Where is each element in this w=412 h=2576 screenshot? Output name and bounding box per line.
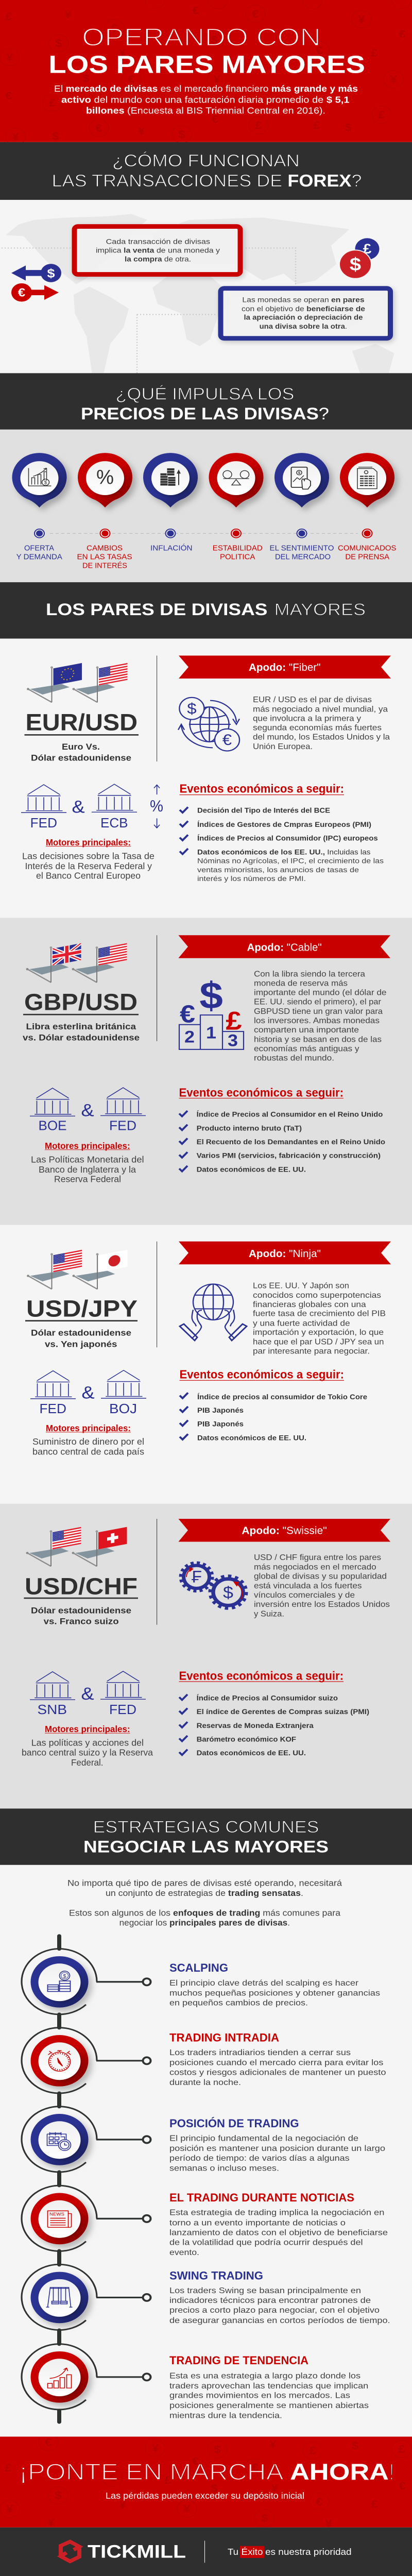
central banks bbox=[21, 784, 137, 831]
description: y Suiza. bbox=[254, 1609, 284, 1618]
panel: GBP/USD bbox=[0, 918, 412, 1225]
step: scalping: SCALPING bbox=[169, 1962, 228, 1975]
intro text: un conjunto de estrategias de trading sensatas. bbox=[106, 1888, 303, 1898]
pin: market sentiment: $ bbox=[298, 471, 301, 475]
description: global de divisas y su popularidad bbox=[254, 1572, 387, 1581]
main drivers: Motores principales: bbox=[46, 1423, 131, 1434]
description: importante del mundo (el dólar de bbox=[254, 988, 386, 997]
main drivers bbox=[22, 1724, 153, 1768]
economic events: PIB Japonés bbox=[197, 1406, 244, 1415]
tagline: es nuestra prioridad bbox=[265, 2547, 352, 2557]
economic events: Índices de Gestores de Cmpras Europeos (PMI) bbox=[197, 821, 371, 829]
main drivers: Interés de la Reserva Federal y bbox=[25, 861, 152, 871]
pair title: USD/JPY bbox=[26, 1296, 138, 1322]
central banks: BOJ bbox=[109, 1401, 137, 1416]
main drivers: Las decisiones sobre la Tasa de bbox=[22, 852, 154, 861]
main drivers: banco central suizo y la Reserva bbox=[22, 1748, 153, 1758]
economic events bbox=[179, 783, 384, 883]
heading: que impulsa: ¿QUÉ IMPULSA LOS bbox=[115, 385, 294, 403]
economic events: El índice de Gerentes de Compras suizas (PMI) bbox=[197, 1708, 369, 1716]
description: moneda de reserva más bbox=[254, 978, 348, 988]
callout: blue box: una divisa sobre la otra. bbox=[260, 323, 347, 331]
main drivers: Suministro de dinero por el bbox=[32, 1437, 144, 1447]
panel: strategies bbox=[0, 1865, 412, 2436]
step: trading de tendencia bbox=[22, 2344, 369, 2420]
step: trading durante noticias: evento. bbox=[169, 2248, 199, 2257]
icon: currency podium: 1 bbox=[206, 1024, 216, 1042]
driver labels: CAMBIOS bbox=[87, 544, 123, 552]
heading: que impulsa bbox=[0, 373, 412, 430]
pin: political stability bbox=[209, 453, 264, 507]
economic events: Datos económicos de EE. UU. bbox=[197, 1749, 306, 1757]
description: más negociados en el mercado bbox=[254, 1562, 376, 1571]
description: EE. UU. siendo el primero), el par bbox=[254, 997, 381, 1006]
economic events: PIB Japonés bbox=[197, 1420, 244, 1428]
economic events: Índice de precios al consumidor de Tokio Core bbox=[197, 1393, 367, 1401]
description bbox=[253, 695, 390, 751]
icon: currency podium bbox=[179, 975, 244, 1050]
central banks: FED bbox=[109, 1702, 136, 1717]
economic events: Eventos económicos a seguir: bbox=[179, 1670, 344, 1683]
pair title bbox=[24, 1573, 138, 1626]
background currency pattern: £¥€€¥££$¥$€€$€¥€$¥€$¥€¥££€$¥£ bbox=[5, 4, 406, 143]
economic events: Producto interno bruto (TaT) bbox=[197, 1124, 302, 1132]
ribbon: nickname bbox=[178, 935, 390, 958]
step: posicion de trading bbox=[22, 2107, 385, 2173]
heading: los pares de divisas mayores bbox=[0, 582, 412, 639]
economic events: El Recuento de los Demandantes en el Reino Unido bbox=[197, 1138, 385, 1146]
icon: globe held by hands bbox=[180, 1284, 247, 1341]
intro text bbox=[67, 1878, 342, 1927]
step: posicion de trading: El principio fundamental de la negociación de bbox=[169, 2133, 358, 2143]
driver labels: OFERTA bbox=[24, 544, 54, 552]
ribbon: nickname: Apodo: "Ninja" bbox=[249, 1247, 321, 1260]
pair title bbox=[25, 1296, 138, 1349]
title: OPERANDO CON bbox=[82, 23, 321, 51]
economic events: Índice de Precios al Consumidor suizo bbox=[197, 1694, 338, 1702]
economic events: Varios PMI (servicios, fabricación y construcción) bbox=[197, 1152, 381, 1160]
description: Con la libra siendo la tercera bbox=[254, 969, 366, 978]
intro text: Estos son algunos de los enfoques de trading más comunes para bbox=[69, 1908, 340, 1918]
driver labels: ESTABILIDAD bbox=[213, 544, 263, 552]
icon: buying euro arrow bbox=[11, 283, 59, 302]
description: Los EE. UU. Y Japón son bbox=[253, 1281, 349, 1290]
economic events: Datos económicos de EE. UU. bbox=[197, 1434, 306, 1442]
icon: currency podium: 2 bbox=[184, 1028, 195, 1046]
main drivers: Reserva Federal bbox=[54, 1175, 121, 1184]
step: trading de tendencia: TRADING DE TENDENCIA bbox=[169, 2354, 308, 2367]
logo: tickmill: TICKMILL bbox=[88, 2541, 186, 2562]
pair title: EUR/USD bbox=[26, 709, 138, 736]
pin: interest rates: % bbox=[96, 466, 114, 488]
step: trading intradia: costos y riesgos adicionales de mantener un puesto bbox=[169, 2067, 386, 2077]
driver labels: DE INTERÉS bbox=[82, 561, 127, 570]
pin: inflation bbox=[143, 453, 198, 507]
disclaimer: Las pérdidas pueden exceder su depósito inicial bbox=[106, 2491, 304, 2501]
description: está vinculada a los fuertes bbox=[254, 1581, 362, 1590]
heading: como funcionan: ¿CÓMO FUNCIONAN bbox=[112, 151, 300, 171]
intro text: negociar los principales pares de divisas. bbox=[119, 1918, 290, 1927]
description: hace que el par USD / JPY sea un bbox=[253, 1337, 384, 1346]
panel: footer bbox=[0, 2528, 412, 2576]
economic events: Eventos económicos a seguir: bbox=[179, 1087, 344, 1099]
description: robustas del mundo. bbox=[254, 1053, 334, 1062]
heading: como funcionan: LAS TRANSACCIONES DE FOREX? bbox=[52, 172, 362, 191]
description: más negociado a nivel mundial, ya bbox=[253, 704, 388, 714]
central banks: FED bbox=[30, 816, 57, 831]
economic events: Eventos económicos a seguir: bbox=[179, 783, 344, 795]
step: trading durante noticias: Esta estrategia de trading implica la negociación en bbox=[169, 2208, 384, 2217]
step: posicion de trading: semanas o incluso meses. bbox=[169, 2163, 279, 2173]
heading: que impulsa: PRECIOS DE LAS DIVISAS? bbox=[81, 405, 329, 423]
description: segunda economías más fuertes bbox=[253, 723, 382, 732]
economic events: Índice de Precios al Consumidor en el Reino Unido bbox=[197, 1110, 383, 1118]
pin: press releases bbox=[340, 453, 394, 507]
step: trading de tendencia: grandes movimientos en los mercados. Las bbox=[169, 2391, 350, 2400]
pin: supply and demand bbox=[12, 453, 67, 507]
pair title: USD/CHF bbox=[25, 1573, 138, 1600]
step: posicion de trading: POSICIÓN DE TRADING bbox=[169, 2116, 299, 2130]
flags: US and Switzerland bbox=[26, 1527, 127, 1566]
driver labels: EL SENTIMIENTO bbox=[270, 544, 334, 552]
main drivers: Motores principales: bbox=[45, 1724, 130, 1735]
main drivers bbox=[31, 1141, 144, 1184]
pair title: Libra esterlina británica bbox=[26, 1022, 136, 1031]
main drivers bbox=[32, 1423, 144, 1457]
callout: blue box bbox=[220, 289, 390, 338]
step: scalping bbox=[22, 1949, 380, 2014]
dotted connectors bbox=[2, 248, 296, 373]
main drivers: Motores principales: bbox=[46, 838, 131, 848]
step: swing trading: Los traders Swing se basan principalmente en bbox=[169, 2286, 361, 2295]
economic events: Reservas de Moneda Extranjera bbox=[197, 1722, 314, 1730]
description: importación y exportación, lo que bbox=[253, 1328, 384, 1337]
step: trading de tendencia: traders aprovechan las tendencias que implican bbox=[169, 2381, 368, 2391]
icon: coins pound and dollar bbox=[339, 238, 379, 279]
panel: EUR/USD bbox=[0, 639, 412, 918]
economic events: Índices de Precios al Consumidor (IPC) europeos bbox=[197, 834, 378, 842]
panel: USD/JPY bbox=[0, 1225, 412, 1504]
timeline dots bbox=[35, 529, 372, 538]
step: trading durante noticias bbox=[22, 2185, 388, 2257]
icon: selling dollar arrow: $ bbox=[47, 267, 55, 280]
description: fuerte tasa de crecimiento del PIB bbox=[253, 1309, 386, 1318]
icon: linked gears bbox=[181, 1563, 246, 1608]
icon: linked gears: ₣ bbox=[192, 1568, 202, 1586]
call to action heading bbox=[19, 2460, 393, 2485]
description: EUR / USD es el par de divisas bbox=[253, 695, 372, 704]
tagline: Tu bbox=[228, 2547, 238, 2557]
interest rate arrows bbox=[150, 785, 163, 828]
main drivers bbox=[22, 838, 154, 881]
intro text: No importa qué tipo de pares de divisas esté operando, necesitará bbox=[67, 1878, 342, 1888]
economic events: Decisión del Tipo de Interés del BCE bbox=[197, 806, 330, 815]
pair title: vs. Yen japonés bbox=[45, 1339, 117, 1349]
step: scalping: en pequeños cambios de precios. bbox=[169, 1998, 308, 2007]
icon: coins pound and dollar: £ bbox=[363, 242, 372, 257]
description: del mundo, los Estados Unidos y la bbox=[253, 733, 390, 742]
description: historia y se basan en dos de las bbox=[254, 1035, 382, 1044]
main drivers: Las Políticas Monetaria del bbox=[31, 1155, 144, 1165]
call to action heading: ! bbox=[390, 2460, 393, 2485]
ribbon: nickname: Apodo: "Cable" bbox=[247, 941, 322, 953]
pin: market sentiment bbox=[274, 453, 329, 507]
economic events bbox=[179, 1087, 385, 1174]
description: comparten una importante bbox=[254, 1025, 359, 1035]
panel: red call to action bbox=[0, 2433, 412, 2529]
main drivers: banco central de cada país bbox=[32, 1447, 144, 1457]
central banks: & bbox=[81, 1684, 94, 1704]
pair title: vs. Franco suizo bbox=[44, 1617, 119, 1626]
panel: price drivers bbox=[0, 430, 412, 582]
heading: los pares de divisas mayores: MAYORES bbox=[274, 601, 366, 619]
driver labels: EN LAS TASAS bbox=[77, 552, 132, 561]
pin: supply and demand: $ bbox=[44, 480, 47, 485]
heading: como funcionan bbox=[0, 142, 412, 200]
description: inversión entre los Estados Unidos bbox=[254, 1600, 390, 1609]
driver labels: INFLACIÓN bbox=[150, 544, 193, 552]
economic events: Datos económicos de los EE. UU., Incluidas las bbox=[197, 848, 371, 856]
description: y una fuerte actividad de bbox=[253, 1318, 350, 1328]
icon: globe with currencies: $ bbox=[187, 700, 197, 717]
description bbox=[254, 969, 386, 1062]
title: LOS PARES MAYORES bbox=[48, 50, 365, 78]
interest rate arrows: % bbox=[150, 798, 163, 816]
driver labels bbox=[16, 544, 396, 570]
callout: red box bbox=[74, 227, 240, 275]
central banks bbox=[30, 1671, 146, 1717]
description: vínculos comerciales y de bbox=[254, 1590, 355, 1600]
step: trading durante noticias: EL TRADING DURANTE NOTICIAS bbox=[169, 2192, 354, 2205]
driver labels: POLITICA bbox=[220, 552, 255, 561]
central banks bbox=[30, 1088, 146, 1133]
description: los inversores. Ambas monedas bbox=[254, 1016, 380, 1025]
ribbon: nickname bbox=[179, 1242, 391, 1264]
icon: coins pound and dollar: $ bbox=[350, 255, 361, 275]
icon: currency podium: 3 bbox=[228, 1031, 238, 1050]
main drivers: Federal. bbox=[71, 1758, 103, 1768]
pair title bbox=[25, 709, 139, 762]
flags: UK and US bbox=[26, 943, 127, 982]
pair title: GBP/USD bbox=[24, 989, 138, 1015]
intro text: billones (Encuesta al BIS Triennial Central en 2016). bbox=[86, 106, 325, 116]
description bbox=[254, 1553, 390, 1618]
description: que involucra a la primera y bbox=[253, 714, 361, 723]
step: swing trading bbox=[22, 2264, 390, 2330]
callout: red box: implica la venta de una moneda y bbox=[96, 247, 220, 255]
icon: globe with currencies bbox=[178, 698, 239, 751]
central banks: ECB bbox=[100, 816, 128, 831]
step: scalping: muchos pequeñas posiciones y obtener ganancias bbox=[169, 1988, 380, 1997]
step: posicion de trading: período de tiempo: de varios días a algunas bbox=[169, 2154, 350, 2163]
central banks bbox=[30, 1370, 146, 1416]
step: swing trading: de asegurar ganancias en cortos períodos de tiempo. bbox=[169, 2316, 390, 2325]
central banks: BOE bbox=[38, 1118, 67, 1133]
panel: USD/CHF bbox=[0, 1504, 412, 1808]
driver labels: COMUNICADOS bbox=[338, 544, 396, 552]
step: trading de tendencia: mientras dure la tendencia. bbox=[169, 2411, 282, 2420]
step: trading intradia: durante la noche. bbox=[169, 2078, 241, 2087]
icon: currency podium: £ bbox=[226, 1007, 242, 1036]
flags: EU and US bbox=[27, 663, 128, 702]
step: scalping: El principio clave detrás del scalping es hacer bbox=[169, 1978, 358, 1988]
description: USD / CHF figura entre los pares bbox=[254, 1553, 381, 1562]
driver labels: DE PRENSA bbox=[345, 552, 389, 561]
ribbon: nickname: Apodo: "Fiber" bbox=[249, 661, 320, 673]
step: swing trading: SWING TRADING bbox=[169, 2269, 263, 2282]
main drivers: Motores principales: bbox=[45, 1141, 130, 1151]
callout: red box: Cada transacción de divisas bbox=[106, 238, 210, 246]
economic events: Nóminas no Agrícolas, el IPC, el crecimiento de las bbox=[197, 857, 384, 865]
driver labels: Y DEMANDA bbox=[16, 552, 62, 561]
description: conocidos como superpotencias bbox=[253, 1291, 381, 1300]
driver labels: DEL MERCADO bbox=[275, 552, 331, 561]
heading: estrategias comunes bbox=[0, 1808, 412, 1865]
central banks: FED bbox=[39, 1401, 66, 1416]
vertical connector bbox=[57, 1936, 61, 2422]
callout: blue box: Las monedas se operan en pares bbox=[242, 296, 365, 304]
description bbox=[253, 1281, 386, 1355]
economic events: interés y los números de PMI. bbox=[197, 875, 306, 883]
pair title: vs. Dólar estadounidense bbox=[23, 1032, 140, 1042]
economic events: Datos económicos de EE. UU. bbox=[197, 1165, 306, 1174]
call to action heading: ¡PONTE EN MARCHA bbox=[19, 2460, 284, 2485]
description: par interesante para negociar. bbox=[253, 1347, 370, 1355]
icon: linked gears: $ bbox=[223, 1584, 233, 1602]
step: trading durante noticias: de la volatilidad que podría ocurrir después del bbox=[169, 2238, 363, 2247]
callout: blue box: con el objetivo de beneficiarse de bbox=[242, 306, 365, 313]
pair title: Dólar estadounidense bbox=[31, 1328, 131, 1337]
pair title: Dólar estadounidense bbox=[31, 1605, 131, 1615]
economic events bbox=[179, 1670, 369, 1757]
pair title bbox=[23, 989, 140, 1042]
intro text bbox=[54, 84, 358, 116]
step: swing trading: indicadores técnicos para encontrar patrones de bbox=[169, 2296, 371, 2305]
tagline bbox=[228, 2546, 352, 2558]
step: scalping: $ bbox=[63, 1974, 66, 1979]
panel: how forex works bbox=[0, 200, 412, 373]
icon: globe with currencies: € bbox=[222, 732, 232, 749]
icon: buying euro arrow: € bbox=[18, 286, 26, 299]
title bbox=[48, 23, 365, 78]
main drivers: el Banco Central Europeo bbox=[36, 871, 141, 881]
callout: blue box: la apreciación o depreciación de bbox=[244, 314, 363, 321]
central banks: & bbox=[81, 1100, 94, 1120]
world map bbox=[6, 214, 394, 373]
description: financieras globales con una bbox=[253, 1300, 366, 1309]
tagline: Éxito bbox=[241, 2547, 263, 2557]
description: Unión Europea. bbox=[253, 742, 313, 751]
step: trading intradia: TRADING INTRADIA bbox=[169, 2032, 279, 2044]
heading: estrategias comunes: NEGOCIAR LAS MAYORES bbox=[83, 1838, 329, 1856]
step: trading de tendencia: Esta es una estrategia a largo plazo donde los bbox=[169, 2371, 360, 2380]
main drivers: Las políticas y acciones del bbox=[31, 1738, 144, 1748]
step: trading intradia: posiciones cuando el mercado cierra para evitar los bbox=[169, 2058, 383, 2067]
central banks: SNB bbox=[37, 1702, 67, 1717]
icon: currency podium: $ bbox=[199, 975, 223, 1017]
ribbon: nickname: Apodo: "Swissie" bbox=[242, 1524, 327, 1536]
description: GBPUSD tiene un gran valor para bbox=[254, 1007, 383, 1016]
step: trading durante noticias: NEWS bbox=[49, 2212, 64, 2216]
economic events: ventas minoristas, los anuncios de tasas de bbox=[197, 866, 359, 874]
central banks: & bbox=[72, 797, 85, 817]
icon: selling dollar arrow bbox=[11, 264, 61, 282]
description: economías más antiguas y bbox=[254, 1044, 359, 1053]
economic events: Eventos económicos a seguir: bbox=[179, 1368, 344, 1381]
pin: interest rates bbox=[78, 453, 132, 507]
central banks: FED bbox=[109, 1118, 136, 1133]
heading: estrategias comunes: ESTRATEGIAS COMUNES bbox=[93, 1818, 319, 1837]
step: trading intradia bbox=[22, 2028, 386, 2093]
step: trading durante noticias: lanzamiento de datos con el objetivo de beneficiarse bbox=[169, 2228, 388, 2237]
main drivers: Banco de Inglaterra y la bbox=[39, 1165, 136, 1175]
step: trading durante noticias: torno a un evento importante de noticias o bbox=[169, 2218, 346, 2227]
pair title: Euro Vs. bbox=[62, 742, 100, 752]
pair title: Dólar estadounidense bbox=[31, 753, 131, 762]
heading: los pares de divisas mayores: LOS PARES DE DIVISAS bbox=[46, 601, 267, 619]
ribbon: nickname bbox=[179, 655, 391, 679]
step: trading intradia: Los traders intradiarios tienden a cerrar sus bbox=[169, 2048, 351, 2057]
callout: red box: la compra de otra. bbox=[125, 256, 191, 263]
icon: currency podium: € bbox=[180, 1000, 195, 1028]
step: posicion de trading: posición es mantener una posicion durante un largo bbox=[169, 2144, 385, 2153]
flags: US and Japan bbox=[27, 1250, 128, 1289]
intro text: activo del mundo con una facturación diaria promedio de $ 5,1 bbox=[61, 95, 349, 105]
economic events bbox=[179, 1368, 367, 1442]
call to action heading: AHORA bbox=[290, 2460, 389, 2485]
step: swing trading: precios a corto plazo para negociar, con el objetivo bbox=[169, 2306, 380, 2315]
central banks: & bbox=[81, 1383, 95, 1402]
panel: red header bbox=[0, 0, 412, 145]
economic events: Barómetro económico KOF bbox=[197, 1735, 296, 1743]
step: trading de tendencia: posiciones generalmente se mantienen abiertas bbox=[169, 2401, 369, 2410]
ribbon: nickname bbox=[178, 1519, 390, 1542]
background currency pattern: €¥$¥£$££¥€€€£$$¥€¥¥¥€£$¥¥ bbox=[5, 2436, 406, 2529]
intro text: El mercado de divisas es el mercado financiero más grande y más bbox=[54, 84, 358, 94]
